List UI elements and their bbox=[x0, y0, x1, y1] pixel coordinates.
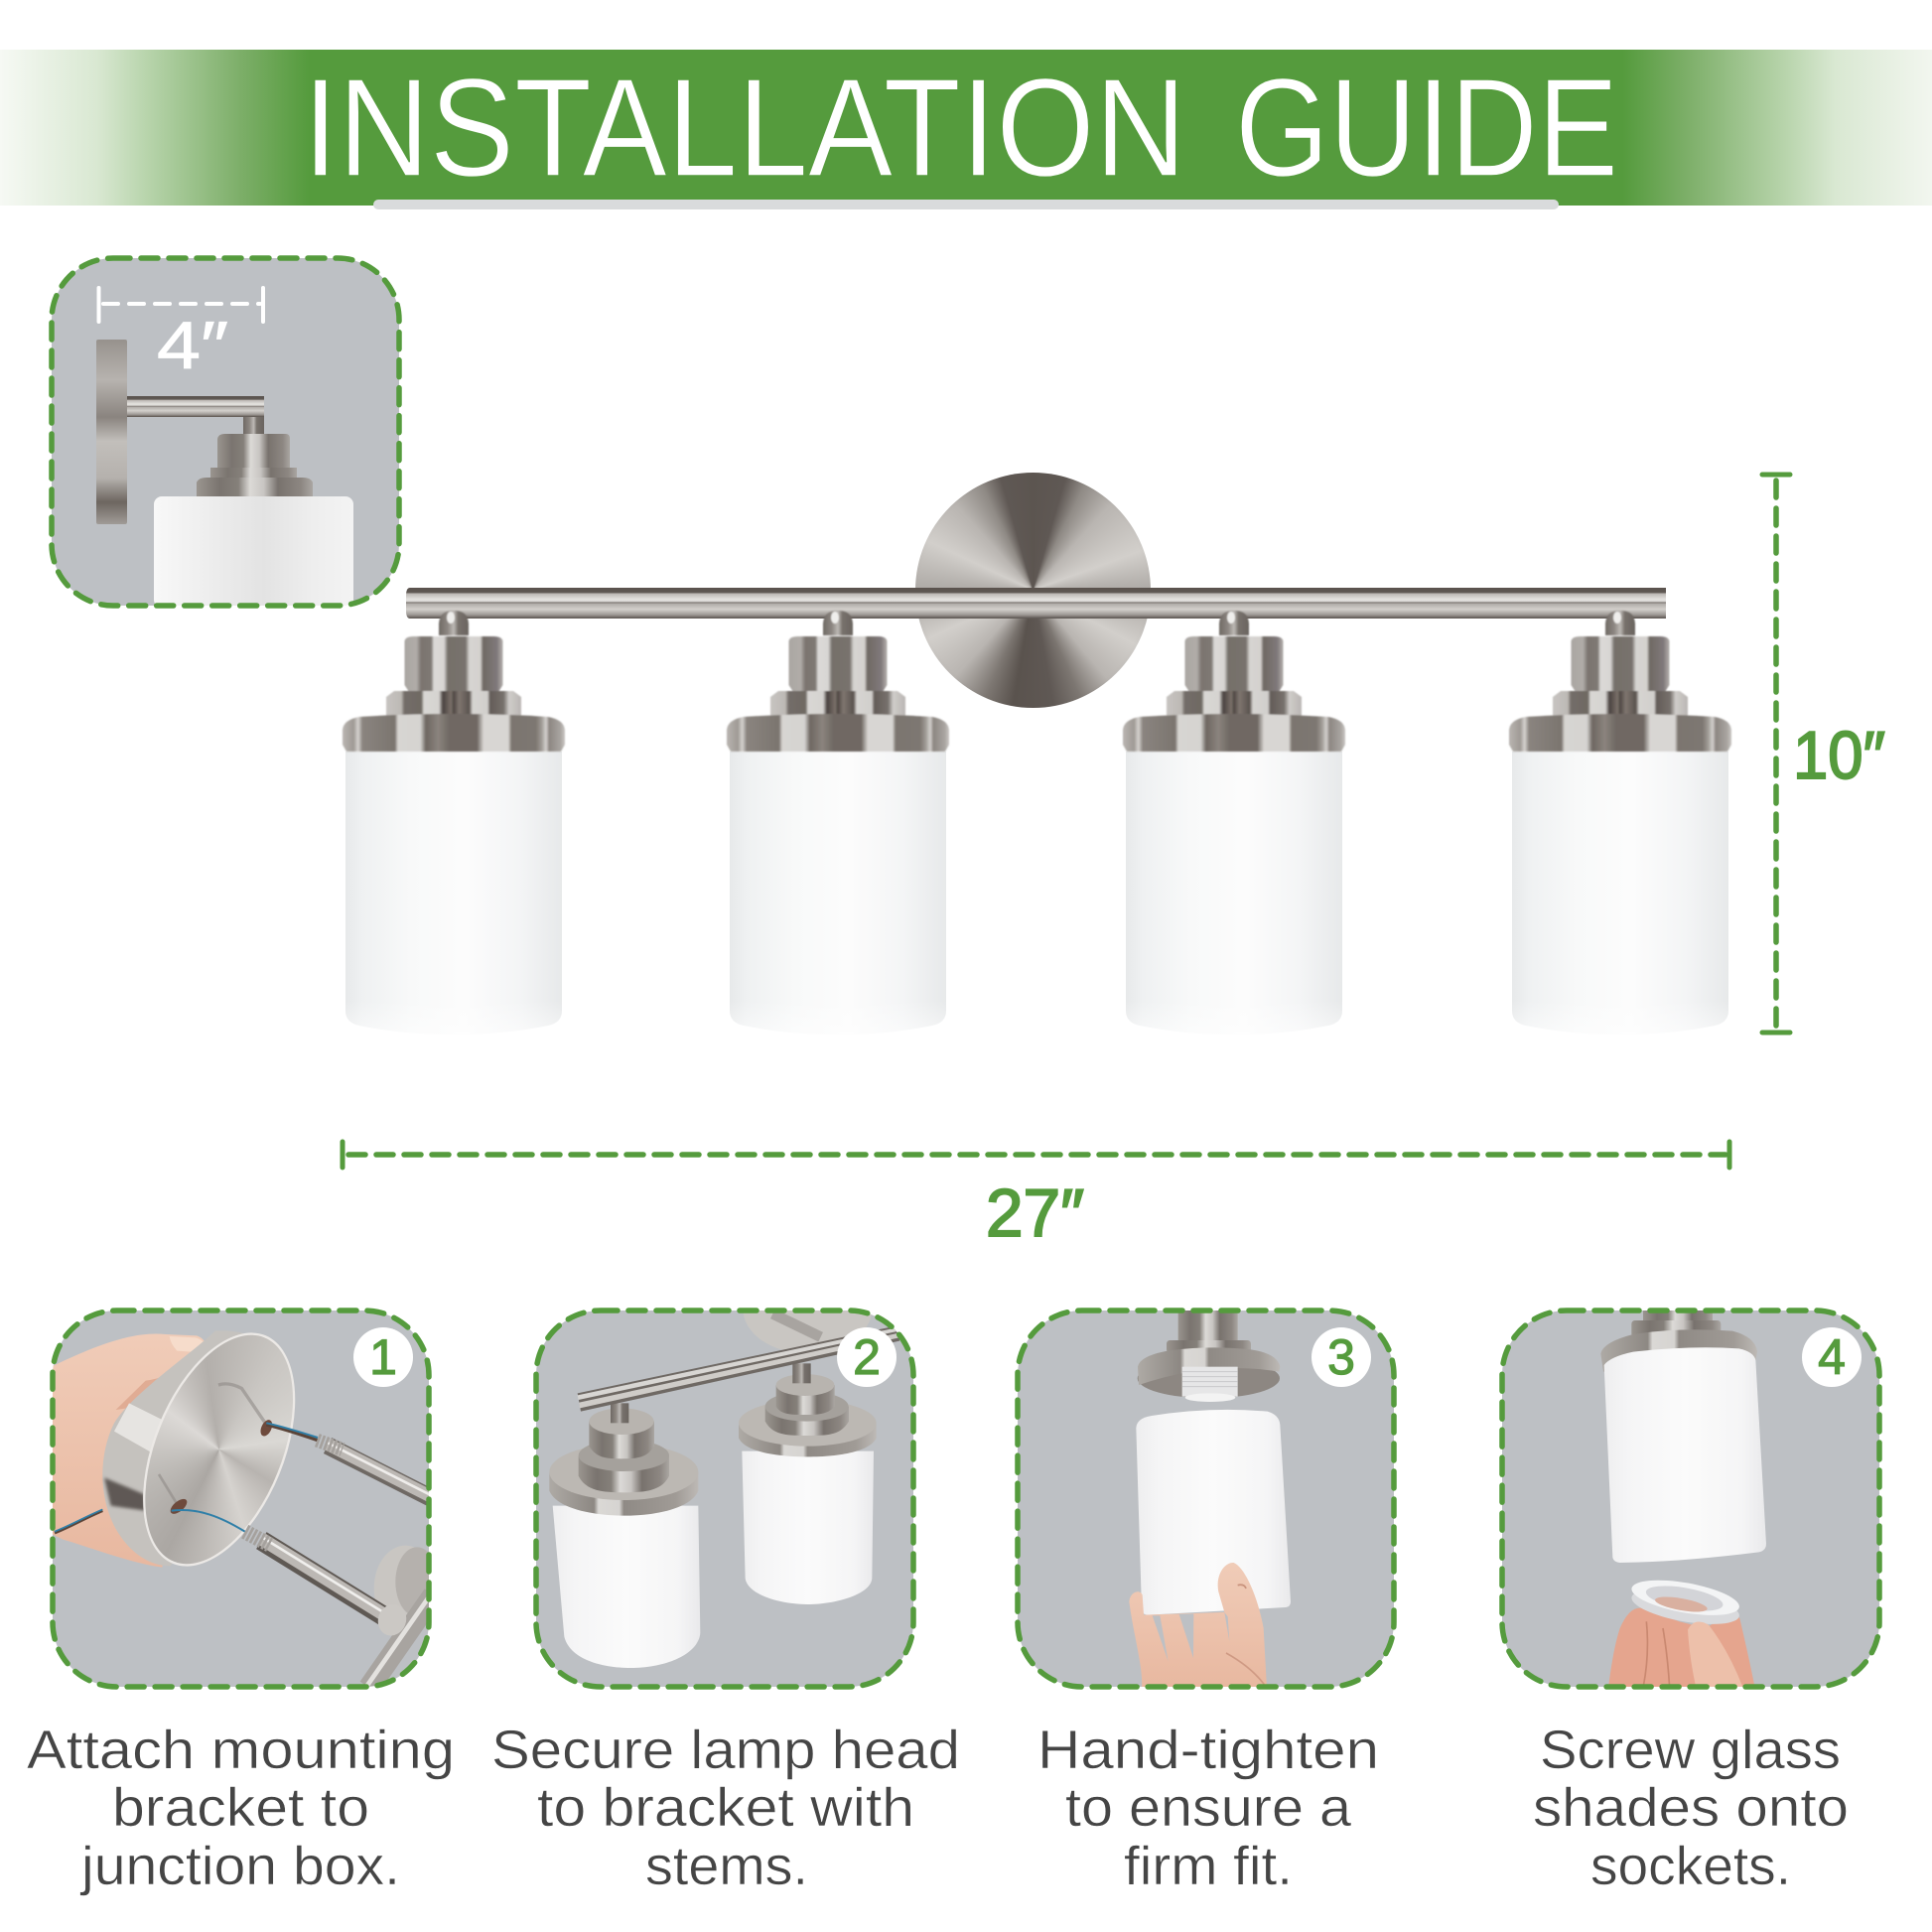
depth dimension line bbox=[99, 288, 263, 322]
step number 3 bbox=[1311, 1327, 1371, 1387]
horizontal bar bbox=[406, 588, 1666, 619]
lamp 3 bbox=[1123, 611, 1345, 1035]
lamp 4 bbox=[1509, 611, 1731, 1035]
title banner bbox=[0, 49, 1932, 209]
side view fixture bbox=[96, 340, 353, 608]
caption: step 2 bbox=[491, 1719, 960, 1896]
height dimension bbox=[1762, 475, 1885, 1033]
bracket side wall bbox=[102, 1340, 207, 1566]
panel: step 4 bbox=[1502, 1309, 1879, 1688]
step number 1 bbox=[353, 1327, 413, 1387]
depth label: 4″ bbox=[157, 308, 228, 383]
caption: step 4: Screw glass bbox=[1540, 1719, 1841, 1780]
title: INSTALLATION bbox=[303, 49, 1186, 206]
caption: step 3 bbox=[1037, 1719, 1379, 1896]
caption: step 2: stems. bbox=[645, 1835, 808, 1896]
width dimension bbox=[343, 1142, 1729, 1251]
caption: step 4 bbox=[1533, 1719, 1849, 1896]
step number 3: 3 bbox=[1327, 1329, 1355, 1385]
step number 2 bbox=[837, 1327, 897, 1387]
caption: step 1: bracket to bbox=[112, 1776, 369, 1838]
lamp 1 bbox=[343, 611, 565, 1035]
panel: step 1 bbox=[50, 1311, 439, 1688]
height label: 10″ bbox=[1793, 718, 1885, 793]
title: GUIDE bbox=[1235, 49, 1618, 206]
caption: step 1: Attach mounting bbox=[27, 1719, 455, 1780]
caption: step 2: Secure lamp head bbox=[491, 1719, 960, 1780]
panel: 4 inch depth side view bbox=[52, 258, 399, 608]
panel: step 3 bbox=[1018, 1309, 1394, 1688]
lamp 2 bbox=[727, 611, 949, 1035]
photo: lamp heads attached to bracket bbox=[549, 1311, 899, 1668]
vanity light fixture bbox=[343, 473, 1731, 1035]
photo: screwing shade with retaining ring bbox=[1600, 1309, 1766, 1688]
width label: 27″ bbox=[986, 1175, 1084, 1251]
caption: step 3: firm fit. bbox=[1124, 1835, 1293, 1896]
photo: hand holding glass shade below socket bbox=[1129, 1309, 1291, 1688]
wall plate bbox=[915, 473, 1151, 708]
banner underline bbox=[373, 200, 1559, 209]
caption: step 1: junction box. bbox=[79, 1835, 400, 1896]
photo: hand holding mounting bracket with rods bbox=[50, 1311, 439, 1688]
caption: step 1 bbox=[27, 1719, 455, 1896]
caption: step 3: to ensure a bbox=[1065, 1776, 1351, 1838]
caption: step 4: shades onto bbox=[1533, 1776, 1849, 1838]
panel: step 2 bbox=[536, 1264, 913, 1687]
step number 1: 1 bbox=[369, 1329, 397, 1385]
step number 4 bbox=[1802, 1327, 1862, 1387]
caption: step 4: sockets. bbox=[1590, 1835, 1791, 1896]
step number 4: 4 bbox=[1818, 1329, 1846, 1385]
caption: step 2: to bracket with bbox=[537, 1776, 914, 1838]
step number 2: 2 bbox=[853, 1329, 881, 1385]
caption: step 3: Hand-tighten bbox=[1037, 1719, 1379, 1780]
